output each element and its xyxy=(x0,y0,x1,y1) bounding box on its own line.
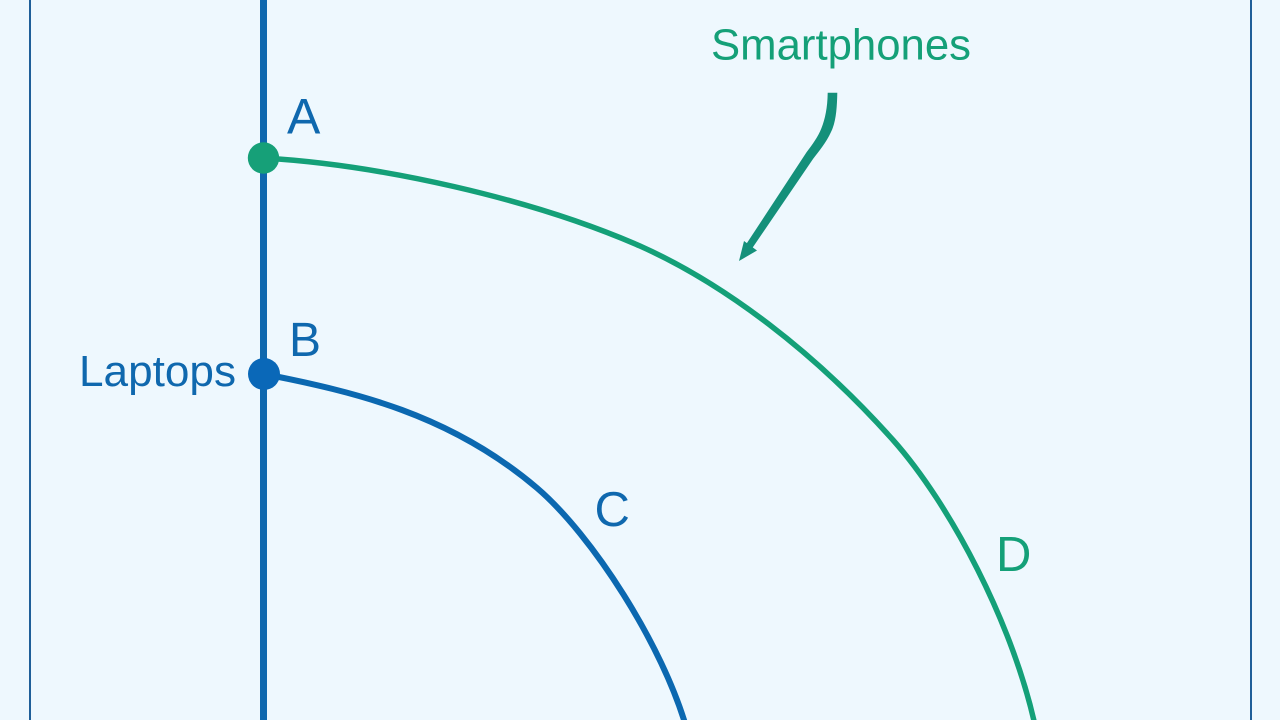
point B marker xyxy=(248,358,280,390)
label C: C xyxy=(594,483,630,537)
label Laptops: Laptops xyxy=(79,347,236,396)
point A marker xyxy=(248,142,279,174)
curve: laptops xyxy=(264,374,687,720)
label Smartphones: Smartphones xyxy=(711,20,971,70)
curve: smartphones xyxy=(264,158,1036,720)
label A: A xyxy=(287,88,321,144)
label B: B xyxy=(289,314,321,367)
label D: D xyxy=(996,528,1031,582)
vertical axis xyxy=(260,0,267,720)
arrow: smartphones pointer xyxy=(739,93,837,261)
